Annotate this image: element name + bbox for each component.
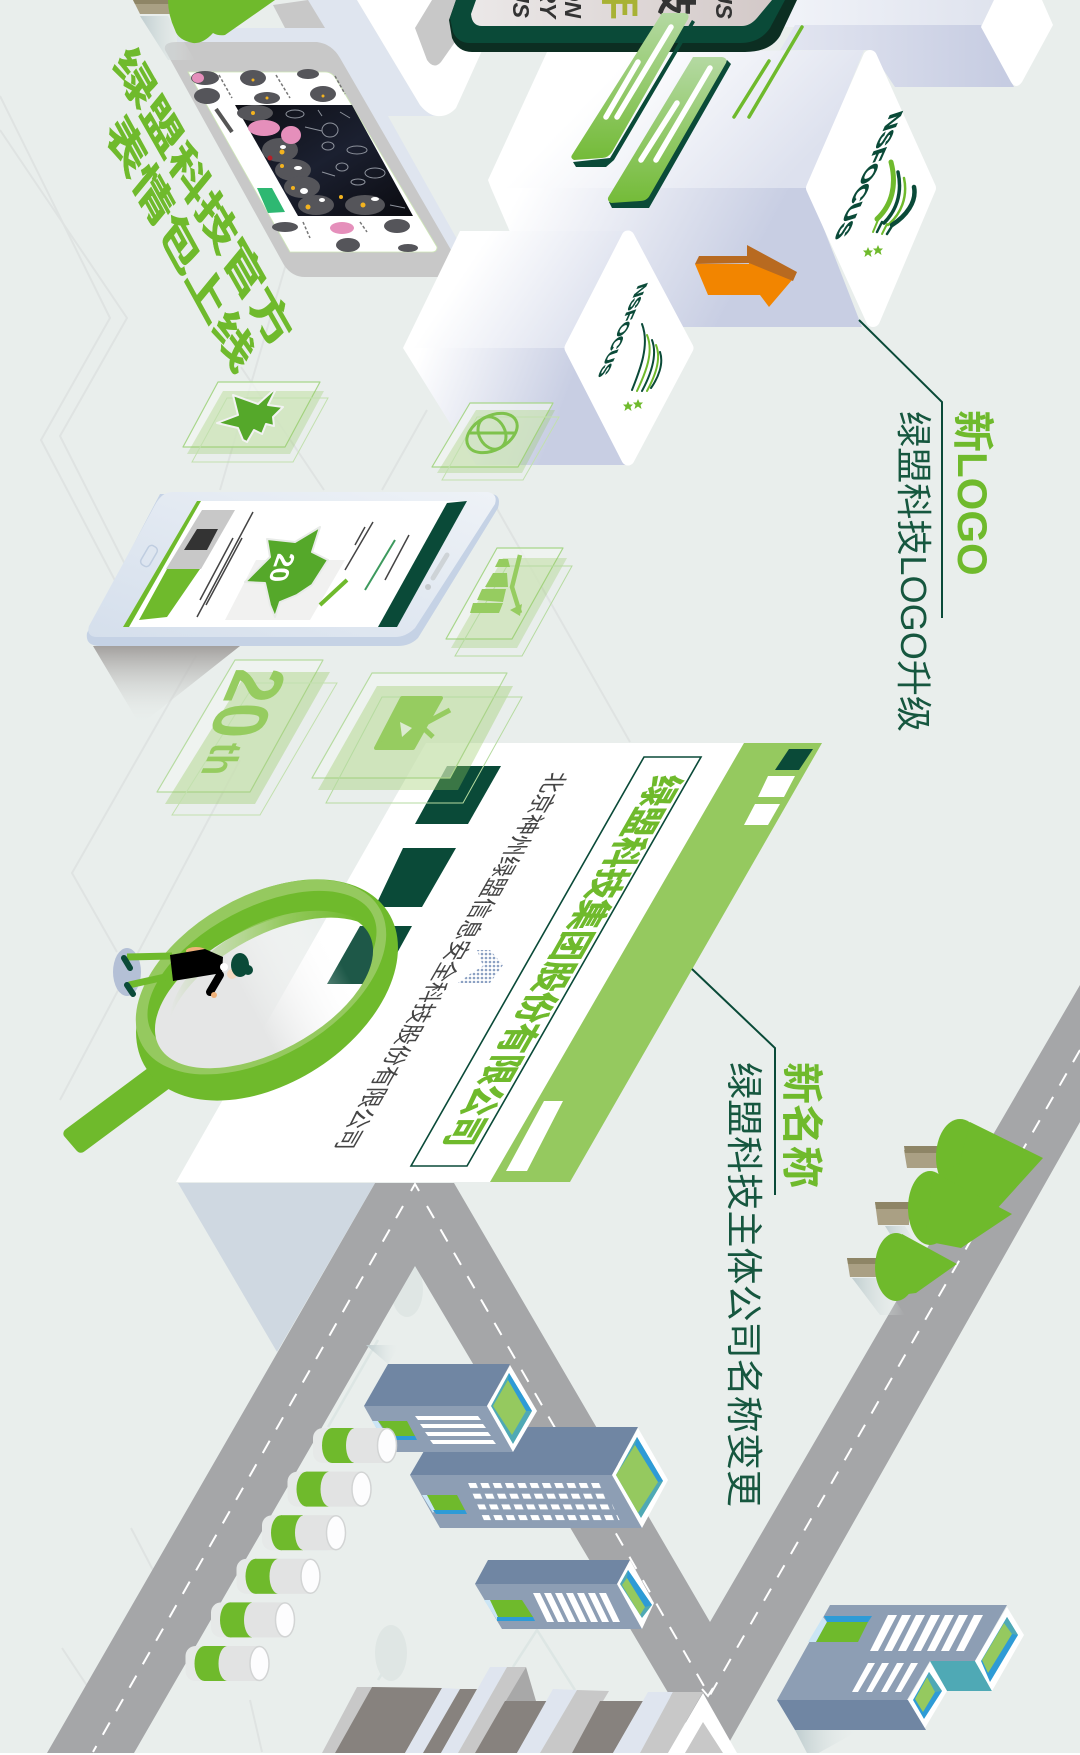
glass panel: globe xyxy=(432,403,559,480)
old NSFOCUS logo xyxy=(593,279,661,411)
billboard text xyxy=(508,0,737,21)
speaker xyxy=(433,555,447,578)
heading: new name: 新名称 xyxy=(778,1062,825,1188)
back cube xyxy=(770,0,1053,87)
title: sticker launch: 表情包上线 xyxy=(98,105,260,382)
icon: globe xyxy=(460,405,524,461)
person xyxy=(113,947,253,998)
cube: new logo xyxy=(488,50,929,327)
old NSFOCUS logo: NSFOCUS xyxy=(593,279,652,381)
pills xyxy=(186,1428,396,1681)
inner wall xyxy=(168,911,372,1027)
20th label xyxy=(190,668,304,775)
shadow under name sheet xyxy=(178,1183,375,1352)
green card bars xyxy=(571,13,802,208)
star badge xyxy=(245,527,328,617)
side face xyxy=(491,188,862,327)
glass panel: video xyxy=(312,673,522,803)
cube: old logo xyxy=(403,231,687,465)
heading: new logo: 新LOGO xyxy=(949,410,996,576)
building: small top xyxy=(364,1345,537,1452)
diamond face xyxy=(813,57,929,320)
building: right bottom xyxy=(777,1605,1024,1755)
glass panel: chart xyxy=(446,548,572,656)
sticker page labels xyxy=(216,75,367,238)
sticker image xyxy=(191,69,418,252)
map markers xyxy=(375,1261,423,1681)
20th label: 20 xyxy=(190,668,304,738)
top face xyxy=(488,50,864,188)
20th label: th xyxy=(190,743,254,775)
name box xyxy=(411,757,701,1166)
old company name: 北京神州绿盟信息安全科技股份有限公司 xyxy=(328,772,572,1150)
subheading: name change: 绿盟科技主体公司名称变更 xyxy=(723,1062,764,1507)
icon: video xyxy=(376,698,450,748)
bottom structure xyxy=(322,1667,737,1753)
callout line: new name xyxy=(692,969,775,1195)
glass panel: 20th xyxy=(157,660,337,815)
screen: 20 xyxy=(262,553,301,582)
dotted logo xyxy=(458,950,503,983)
callout line: new logo xyxy=(859,320,942,618)
building: medium xyxy=(475,1560,654,1629)
white sheet xyxy=(176,743,744,1182)
phone: 20th anniversary page xyxy=(87,492,499,725)
orange arrow xyxy=(695,245,797,307)
phone: sticker page xyxy=(165,42,459,277)
glass panel: star xyxy=(183,382,328,462)
star badge xyxy=(217,387,283,442)
name sheet xyxy=(176,743,822,1182)
new NSFOCUS logo: NSFOCUS xyxy=(828,105,909,245)
lens xyxy=(130,879,398,1101)
road network xyxy=(47,985,1080,1755)
magnifier xyxy=(63,879,398,1153)
bottom edge xyxy=(0,1753,1080,1755)
ring xyxy=(136,879,398,1101)
phone shadow xyxy=(93,646,240,725)
handle xyxy=(63,1065,170,1153)
green header bar xyxy=(490,743,822,1182)
title: sticker launch: 绿盟科技官方 xyxy=(106,37,298,360)
tree top left xyxy=(133,0,275,60)
subheading: logo upgrade: 绿盟科技LOGO升级 xyxy=(893,411,934,732)
building: large xyxy=(410,1427,668,1528)
billboard top xyxy=(449,0,797,52)
dark blocks xyxy=(327,766,501,984)
home button xyxy=(139,544,159,568)
green button xyxy=(257,188,285,213)
icon: chart arrow xyxy=(470,555,522,616)
new company name: 绿盟科技集团股份有限公司 xyxy=(435,775,690,1147)
trees xyxy=(847,1119,1043,1315)
screen xyxy=(123,501,467,627)
top left building strip xyxy=(177,0,505,268)
